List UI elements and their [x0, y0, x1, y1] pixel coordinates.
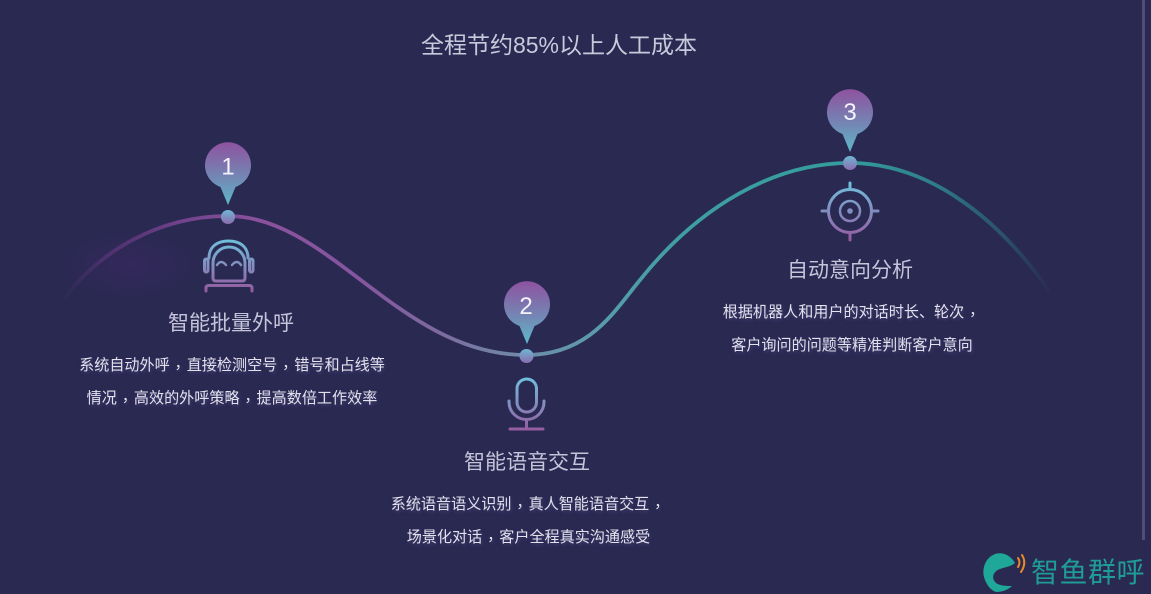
panel: step 2	[391, 450, 665, 549]
panel: step 1	[79, 312, 385, 410]
step 1 text: 情况 高效的外呼策略 提高数倍工作效率	[87, 390, 377, 406]
step 1 heading: 智能批量外呼	[168, 312, 294, 335]
icon: target	[822, 183, 878, 240]
step 1 text: 系统自动外呼 直接检测空号 错号和占线等	[79, 356, 385, 374]
step 3 text: 根据机器人和用户的对话时长、轮次	[723, 304, 964, 320]
step 1 text: ，	[171, 360, 186, 376]
pin 1: 1	[221, 154, 235, 180]
step 2 text: 系统语音语义识别 真人智能语音交互	[391, 496, 649, 513]
pin 2: 2	[519, 293, 533, 320]
panel: step 3	[723, 258, 980, 354]
icon: robot headset	[204, 241, 253, 291]
step 1 text: ，	[240, 392, 256, 410]
pin 3: 3	[843, 99, 857, 126]
pin 1	[205, 142, 251, 224]
step 2 text: 场景化对话 客户全程真实沟通感受	[407, 529, 650, 546]
icon: microphone	[509, 379, 544, 429]
step 2 text: ，	[483, 532, 498, 549]
wave curve	[63, 163, 1050, 355]
step 3 text: ，	[965, 306, 980, 324]
step 3 text	[723, 304, 980, 354]
step 1 text: ，	[278, 360, 293, 376]
step 2 text	[391, 496, 665, 549]
pin 2	[504, 281, 550, 363]
pin 3	[827, 89, 873, 170]
logo mark	[983, 553, 1024, 592]
step 2 heading: 智能语音交互	[464, 451, 590, 474]
step 3 text: 客户询问的问题等精准判断客户意向	[731, 336, 973, 354]
glow patch	[60, 230, 200, 300]
step 3 heading: 自动意向分析	[787, 259, 913, 282]
logo text: 智鱼群呼	[1031, 557, 1145, 588]
step 2 text: ，	[650, 499, 665, 516]
step 2 text: ，	[512, 499, 528, 516]
step 1 text: ，	[118, 392, 133, 410]
right edge line	[1142, 0, 1145, 540]
step 1 text	[79, 356, 385, 410]
title: 全程节约85%以上人工成本	[421, 32, 697, 58]
